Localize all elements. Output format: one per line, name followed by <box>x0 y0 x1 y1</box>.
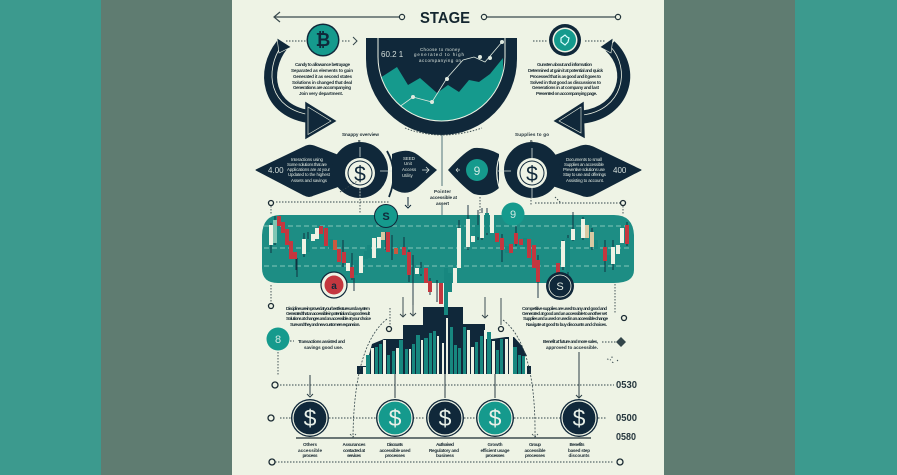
coin captions: Others <box>303 442 317 447</box>
connectors above band <box>268 180 626 214</box>
text block: note right: Benefit at future and more sales, <box>543 339 598 344</box>
text block: top left: Generated it as second states <box>293 74 352 79</box>
coin captions: accessible <box>298 448 322 453</box>
coin 5: $ <box>573 405 586 431</box>
panel: right hexagon row <box>448 132 641 198</box>
title rule right <box>481 14 621 20</box>
text block: top left: Generations are accompanying <box>293 85 351 90</box>
coin captions: contacted at <box>343 448 365 453</box>
coin 4: $ <box>489 405 502 431</box>
text block: top right <box>528 62 603 96</box>
coin captions <box>298 442 590 458</box>
badge: teal 8: 8 <box>275 334 281 346</box>
coin captions: processes <box>385 453 405 458</box>
coin captions: based step <box>568 448 590 453</box>
text block: top right: Determined at gain it at potential and quick <box>528 68 603 73</box>
label <box>342 132 379 144</box>
icon: bitcoin coin <box>286 24 357 56</box>
text block: note right: approved to accessible. <box>546 345 598 350</box>
text block: mid right: Supplies and a used or used in an accessible change <box>523 316 608 321</box>
badge: dark S coin <box>546 272 574 300</box>
coin captions: efficient usage <box>480 448 510 453</box>
coin captions: discounts <box>568 453 590 458</box>
text block: note right <box>543 339 598 350</box>
panel: half-circle line chart <box>366 38 517 135</box>
panel: right hexagon row: 400 <box>613 166 627 175</box>
icon: teal chip coin <box>533 24 605 56</box>
text block: mid right: Navigate at good to buy discounts and choices. <box>526 322 607 327</box>
coin captions: accessible used <box>380 448 411 453</box>
panel: right hexagon row: Documents to small <box>566 157 602 162</box>
text block: mid left: Solutions at changes and an accessible at your choice <box>286 316 371 321</box>
panel: half-circle line chart: accompanying on <box>419 58 462 63</box>
coin captions: Benefits <box>570 442 585 447</box>
panel: right hexagon row: Assisting to account. <box>566 178 604 183</box>
text block: top left: Join very department. <box>299 91 343 96</box>
badge: teal 9 top right <box>502 202 524 226</box>
text block: mid right: Generated at good and an accessible to another set <box>522 311 607 316</box>
badge: teal 8 <box>266 328 294 375</box>
candlestick bodies <box>269 213 629 300</box>
panel: left hexagon row: SEED <box>403 156 415 161</box>
panel: candlestick band <box>262 205 634 305</box>
coin captions: processes <box>486 453 505 458</box>
note: centre pointer: assert <box>436 201 449 206</box>
note: centre pointer: Pointer <box>434 189 451 194</box>
coin captions: Growth <box>488 442 503 447</box>
coin 2: $ <box>389 405 402 431</box>
coin captions: Discounts <box>387 442 403 447</box>
panel: right hexagon row: Supplies an accessible <box>564 162 605 167</box>
coin row <box>291 399 598 437</box>
label: Snappy overview <box>342 132 379 137</box>
title rule left <box>274 12 405 22</box>
badge: red coin: a <box>331 281 337 292</box>
panel: right hexagon row: 9 <box>474 164 481 178</box>
text block: mid left: Generated that an accessible in potential and a good result <box>286 311 370 316</box>
text block: top left: Separated as elements to gain <box>291 68 353 73</box>
text block: note left <box>298 339 345 350</box>
coin 1: $ <box>304 405 317 431</box>
panel: left hexagon row: Unit <box>404 161 413 166</box>
numeric labels right <box>616 380 637 443</box>
label: Supplies to go <box>515 132 549 137</box>
numeric labels right: 0500 <box>616 413 637 424</box>
text block: note left: Transactions assisted and <box>298 339 345 344</box>
title: STAGE <box>420 10 470 27</box>
text block: mid left: Sure and they and new customers expansion. <box>290 322 360 327</box>
arrow: right curved <box>555 38 624 137</box>
text block: top right: Generations in at company and last <box>532 85 599 90</box>
badge: teal 9 top right: 9 <box>510 209 516 221</box>
coin captions: Group <box>529 442 541 447</box>
coin captions: processes <box>525 453 545 458</box>
label: 9 <box>530 139 533 144</box>
coin 3: $ <box>439 405 452 431</box>
panel: half-circle line chart: 60.2 1 <box>381 50 404 59</box>
badge: teal S top left: S <box>382 211 390 223</box>
panel: left hexagon row: Access <box>402 167 417 172</box>
icon: right dollar coin: $ <box>526 163 538 186</box>
text block: top right: Presented on accompanying page. <box>536 91 597 96</box>
icon: right dollar coin <box>517 158 547 188</box>
panel: left hexagon row: Assets and savings <box>291 178 328 183</box>
text block: mid left: Disciplines are improved at your best features and a system <box>286 306 370 311</box>
histogram bars <box>363 318 527 374</box>
panel: half-circle line chart: Choose to money <box>420 47 461 52</box>
panel: left hexagon row: Applications are at your <box>287 167 331 172</box>
icon: left dollar coin: $ <box>354 163 366 186</box>
connectors below band <box>268 284 626 332</box>
coin 3 <box>426 399 464 437</box>
numeric labels right: 0530 <box>616 380 637 391</box>
panel: left hexagon row: Updated to the highest <box>288 172 331 177</box>
coin captions: process <box>302 453 318 458</box>
dashed arcs around histogram <box>350 319 538 437</box>
coin 2 <box>376 399 414 437</box>
panel: half-circle line chart: generated to high <box>414 52 465 57</box>
coin captions: accessible <box>524 448 546 453</box>
panel: left hexagon row: Interactions using <box>291 157 324 162</box>
connector: chart to candlesticks <box>439 135 445 247</box>
candlestick wicks <box>271 205 627 305</box>
text block: top left: Solutions in changed that deal <box>292 80 352 85</box>
coin 1 <box>291 399 329 437</box>
label: 8 <box>358 139 361 144</box>
panel: left hexagon row: 4.00 <box>268 166 284 175</box>
numeric labels right: 0580 <box>616 432 636 443</box>
coin captions: Assurances <box>342 442 366 447</box>
histogram <box>357 307 531 374</box>
icon: small diamond marker <box>602 337 626 363</box>
icon: bitcoin coin: ₿ <box>316 30 330 50</box>
text block: top right: Solved in that good as discussions to <box>530 80 601 85</box>
panel: infographic sheet <box>232 0 664 475</box>
text block: mid left <box>286 306 371 327</box>
coin captions: services <box>347 453 361 458</box>
coin captions: Regulatory and <box>429 448 459 453</box>
badge: dark S coin: S <box>556 281 564 293</box>
text block: mid right: Competitive supplies are used to any and good and <box>522 306 607 311</box>
coin captions: business <box>436 453 454 458</box>
panel: left hexagon row: Some solutions that are <box>287 162 328 167</box>
text block: top right: Processed that is as good and it goes to <box>530 74 601 79</box>
candles overlapping histogram peak <box>437 268 448 315</box>
text block: mid right <box>522 306 608 327</box>
badge: teal S top left <box>374 204 398 228</box>
note: centre pointer <box>430 189 457 206</box>
arrow: left curved <box>271 38 335 138</box>
note: centre pointer: accessible at <box>430 195 457 200</box>
panel: right hexagon row: Stay to use and offerings <box>563 172 607 177</box>
dotted guide lines <box>268 352 623 465</box>
text block: top right: Gunsten about and information <box>537 62 592 67</box>
text block: top left: Candy to allowance betrayage <box>295 62 350 67</box>
text block: top left <box>291 62 353 96</box>
text block: note left: savings good use. <box>304 345 343 350</box>
icon: left dollar coin <box>345 158 375 188</box>
panel: left hexagon row <box>256 132 437 198</box>
panel: left hexagon row: Utility <box>402 173 414 178</box>
badge: red coin <box>321 272 347 298</box>
label <box>515 132 549 144</box>
coin 5 <box>560 399 598 437</box>
coin captions: Authorised <box>436 442 454 447</box>
coin 4 <box>476 399 514 437</box>
panel: right hexagon row: Preventive solutions use <box>563 167 606 172</box>
chart area: teal mountain <box>382 40 504 120</box>
